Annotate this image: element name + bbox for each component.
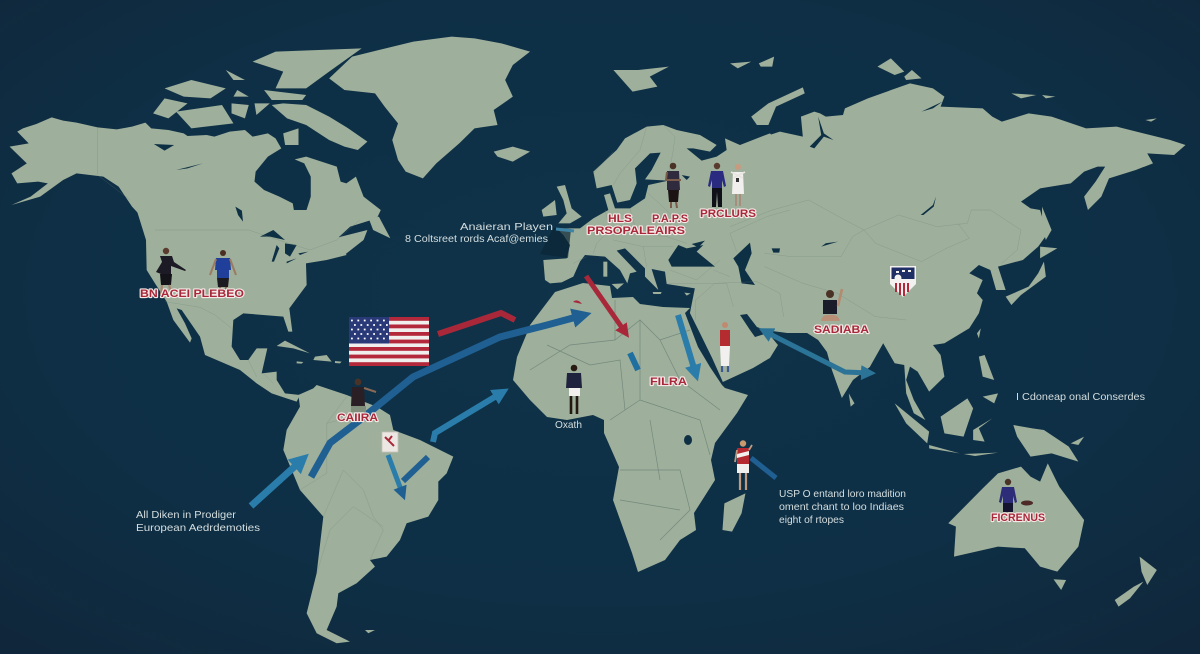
arrow: brazil south [388,455,403,495]
inland seas and lakes [154,102,943,445]
player: madagascar [735,440,752,490]
annotations [136,221,1145,534]
player: white kit russia [731,164,745,206]
player: west africa [566,365,582,414]
arrow: brazil to west africa [433,392,503,442]
arrow: red north africa [586,276,625,332]
note: american players: 8 Coltsreet rords Acaf@emies [405,233,548,245]
icon: brown ball [1021,500,1033,506]
label: europe: PRSOPALEAIRS [587,225,685,237]
player: eastern europe [666,163,681,208]
note: madagascar text: USP O entand loro madition [779,488,906,500]
note: european academies [136,509,260,534]
note: european academies: European Aedrdemoties [136,522,260,534]
land: greenland [329,37,530,178]
land: europe [542,125,790,320]
player: central us [210,250,236,294]
land: africa [513,283,748,572]
note: madagascar text [779,488,906,526]
player: south asia seated [821,289,842,321]
label: filra: FILRA [650,376,687,388]
arrow: main transatlantic [311,315,584,477]
labels: country names [140,208,1045,524]
label: caiira: CAIIRA [337,412,378,424]
player: california [156,248,186,295]
label: hls: HLS [608,213,632,225]
note: madagascar text: oment chant to loo Indiaes [779,501,904,513]
label: paps: P.A.P.S [652,213,688,225]
biscay shading [540,228,571,258]
arrow: east africa [678,315,696,375]
land: asia [613,57,1186,420]
note: conserdes: I Cdoneap onal Conserdes [1016,391,1145,403]
arrow: brazil short [403,457,428,481]
label: preclurs: PRCLURS [700,208,756,220]
arrows [251,229,870,506]
land: usa mexico central america [137,210,347,402]
note: american players [405,221,553,245]
us flag [349,317,429,366]
note: oxath: Oxath [555,419,582,431]
note: american players: Anaieran Playen [460,221,553,233]
player: australia [999,479,1017,512]
arrow: pacific to peru [251,459,303,506]
land: south america [283,385,453,643]
note: madagascar text: eight of rtopes [779,514,844,526]
arrow: red atlantic [438,313,515,334]
label: sadiaba: SADIABA [814,324,869,336]
arrow: sudan short [630,353,638,370]
player: caribbean [351,379,376,412]
arrow: arabia to india [764,331,870,373]
land: oceania and islands [722,328,1157,607]
borders [98,125,1021,573]
icon: shield badge [890,266,916,297]
player: arabia [720,322,730,372]
label: us west: BN ACEI PLEBEO [140,288,244,300]
arrow: madagascar line [751,458,776,478]
land: canada and arctic [10,37,530,267]
label: ficrenus: FICRENUS [991,512,1045,524]
icon: small brazil badge [382,432,398,452]
player: navy russia [708,163,726,207]
note: european academies: All Diken in Prodiger [136,509,237,521]
land: australia [948,463,1084,572]
arrow: biscay streak [556,229,574,231]
